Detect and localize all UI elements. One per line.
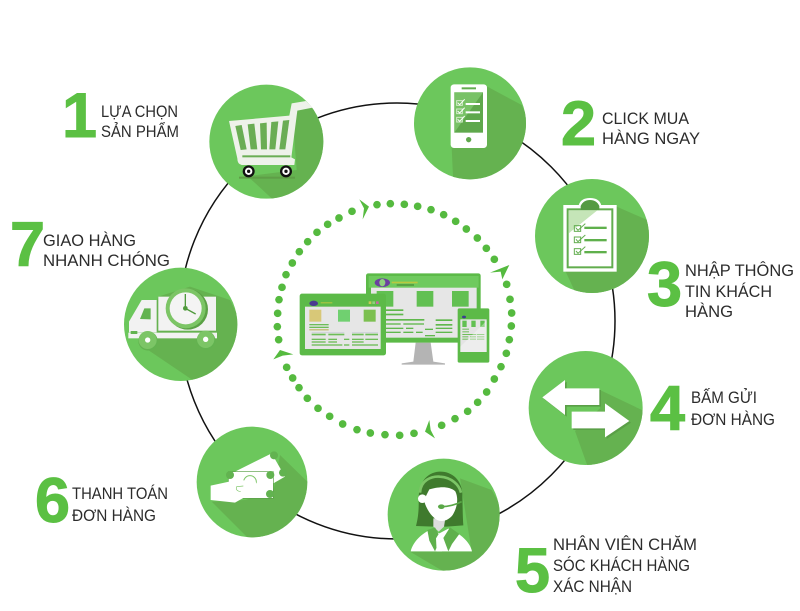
icon: agent [411,472,472,551]
label 4: 4 [650,374,685,444]
label 6 [35,466,168,536]
label 1: LỰA CHỌN [101,103,178,121]
label 2 [561,89,700,159]
label 5 [515,535,697,606]
label 7 [10,210,170,280]
label 1 [62,81,179,151]
monitor [366,273,481,365]
label 5: NHÂN VIÊN CHĂM [553,535,697,554]
step 7 circle: delivery truck with clock [124,268,243,382]
label 7: NHANH CHÓNG [43,251,170,270]
step 2 circle: smartphone checklist [414,67,533,183]
phone [458,308,489,363]
label 2: 2 [561,89,596,159]
step 6 circle: hand with money [197,427,307,543]
step 3 circle: clipboard [535,179,649,293]
icon: arrows [542,380,631,439]
label 3 [647,250,794,321]
label 3: HÀNG [685,302,733,321]
connecting ring [179,103,615,539]
label 3: NHẬP THÔNG [685,261,794,280]
icon: clipboard [563,198,617,272]
icon: truck [128,288,217,351]
label 5: SÓC KHÁCH HÀNG [553,556,690,575]
label 1: 1 [62,81,97,151]
icon: cart [229,101,313,179]
label 5: 5 [515,536,550,606]
label 4: ĐƠN HÀNG [691,410,775,429]
center devices [300,273,489,365]
icon: money [211,451,287,503]
label 3: 3 [647,250,682,320]
label 3: TIN KHÁCH [685,282,772,301]
label 1: SẢN PHẨM [101,122,179,141]
label 4 [650,374,775,444]
label 2: CLICK MUA [602,110,689,128]
step 5 circle: support agent [388,459,507,577]
label 5: XÁC NHẬN [553,577,632,596]
label 6: 6 [35,466,70,536]
step 1 circle: shopping cart [209,84,324,199]
icon: phone [451,84,487,148]
step 4 circle: exchange arrows [529,351,647,468]
label 2: HÀNG NGAY [602,129,700,148]
dotted cycle ring [273,199,515,439]
tablet [300,294,386,355]
label 4: BẤM GỬI [691,388,757,407]
label 6: ĐƠN HÀNG [72,506,156,525]
label 6: THANH TOÁN [72,484,168,503]
label 7: GIAO HÀNG [43,231,136,250]
label 7: 7 [10,210,45,280]
